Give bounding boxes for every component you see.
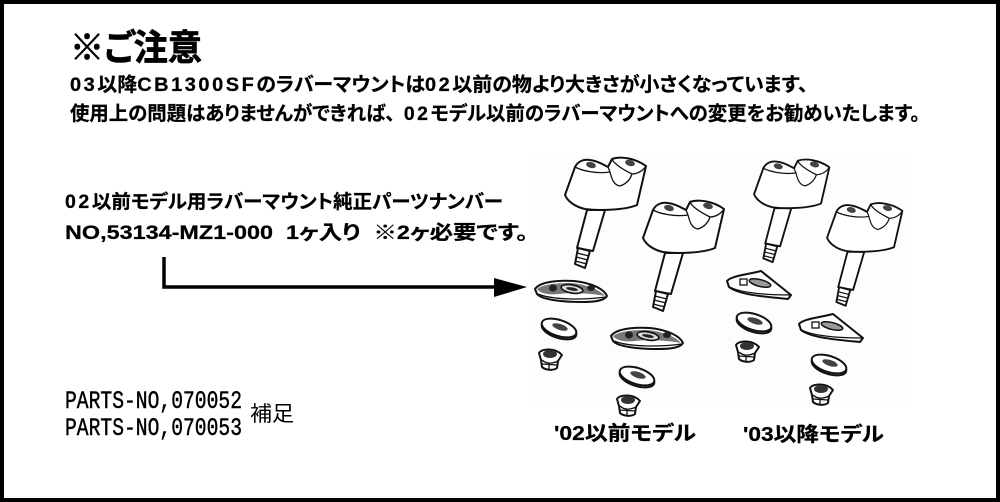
washer 2 (809, 351, 849, 379)
nut 1 (736, 341, 759, 362)
title: ※ご注意 (70, 27, 202, 68)
washer 1 (734, 309, 774, 337)
nut 2 (810, 384, 833, 405)
part number text: 02以前モデル用ラバーマウント純正パーツナンバー (65, 190, 503, 213)
arrow (164, 257, 527, 297)
mount 1 (565, 158, 646, 268)
parts diagram: 03 onward model (727, 160, 902, 405)
plate 1 (727, 271, 791, 299)
part number text (65, 190, 528, 244)
mount 2 (643, 201, 724, 311)
washer 2 (617, 363, 657, 391)
parts numbers: PARTS-NO,070052 (65, 387, 242, 416)
notice text (70, 73, 920, 125)
parts numbers: PARTS-NO,070053 (65, 414, 242, 443)
notice text: 03以降CB1300SFのラバーマウントは02以前の物より大きさが小さくなっています、 (70, 73, 808, 96)
caption: 03 onward model: '03以降モデル (743, 422, 884, 446)
parts diagram: pre-02 model (535, 158, 724, 416)
parts numbers (65, 387, 242, 443)
washer 1 (539, 315, 579, 343)
plate 2 (611, 328, 683, 349)
part number text: NO,53134-MZ1-000 1ヶ入り ※2ヶ必要です。 (65, 222, 528, 244)
mount 1 (754, 160, 829, 262)
mount 2 (827, 203, 902, 306)
nut 1 (539, 349, 562, 370)
parts diagram background (530, 155, 906, 405)
plate 1 (535, 281, 607, 302)
nut 2 (617, 395, 640, 416)
caption: pre-02 model: '02以前モデル (554, 421, 696, 445)
supplement label: 補足 (250, 403, 294, 426)
plate 2 (799, 314, 863, 342)
notice text: 使用上の問題はありませんができれば、 02モデル以前のラバーマウントへの変更をお勧めいたします。 (70, 102, 920, 125)
